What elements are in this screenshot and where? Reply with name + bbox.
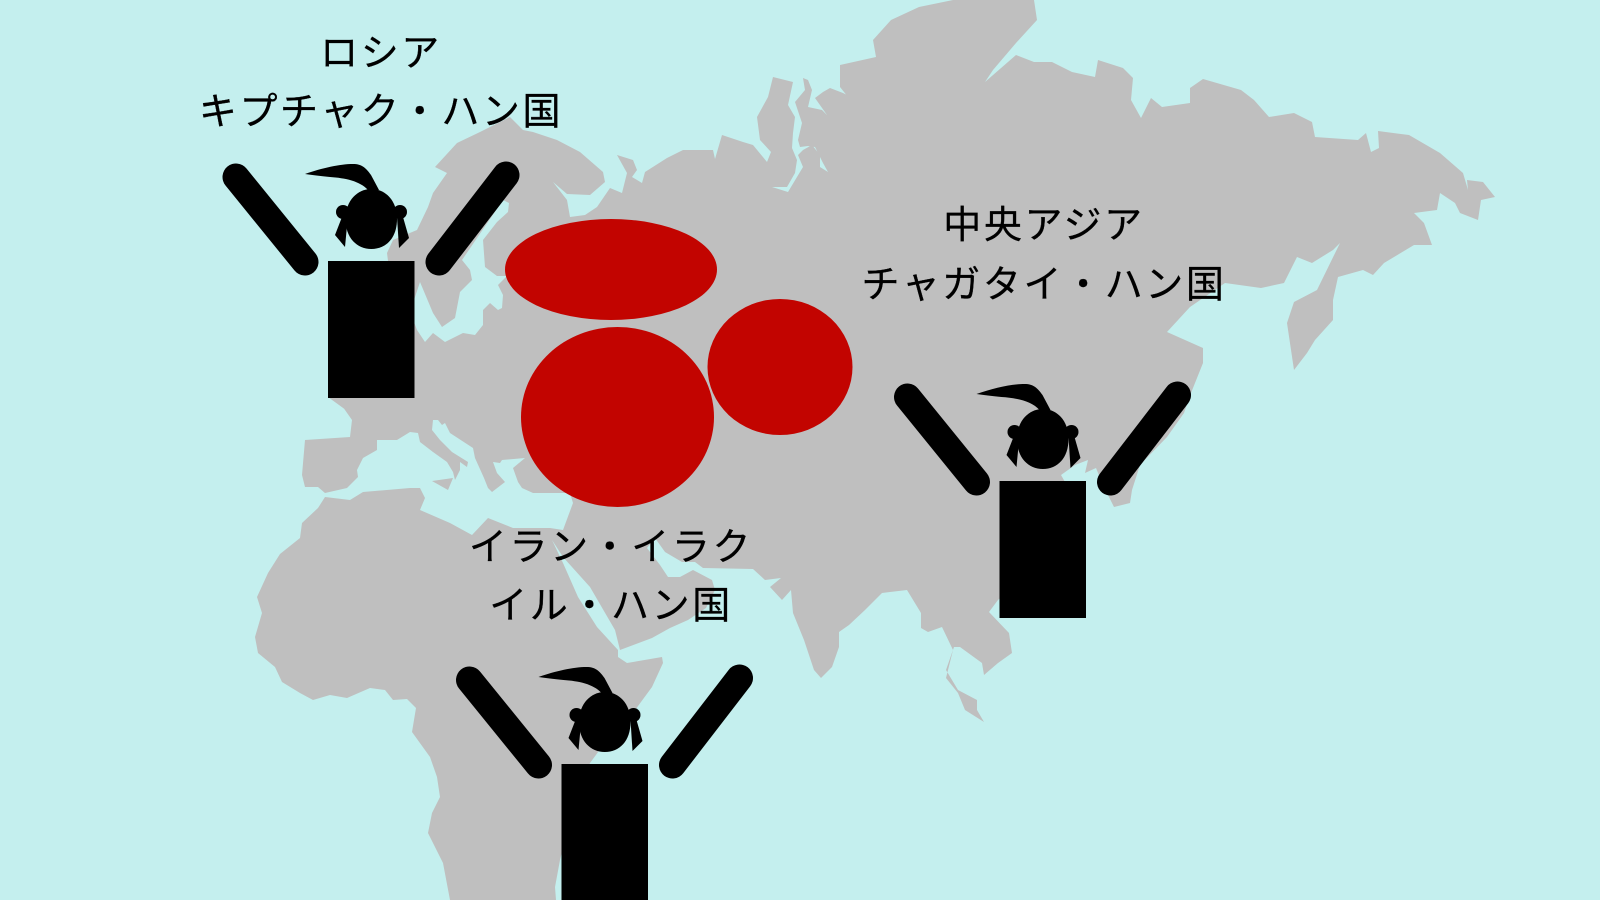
label: Russia / Kipchak Khanate: ロシア [320, 33, 442, 75]
label: Central Asia / Chagatai Khanate: 中央アジア [943, 205, 1145, 247]
Baltic Sea [414, 200, 509, 342]
red region: Ilkhanate [521, 327, 714, 507]
figure: Central Asia warrior [908, 384, 1178, 618]
figure: Russia warrior [236, 164, 506, 398]
world map land [255, 0, 1495, 900]
Sicily [432, 478, 453, 490]
red region: Chagatai Khanate [708, 299, 852, 435]
label: Iran Iraq / Ilkhanate: イル・ハン国 [489, 586, 733, 628]
figure: Iran Iraq warrior [470, 667, 740, 900]
label: Russia / Kipchak Khanate [199, 33, 563, 134]
red region: Kipchak Khanate [505, 219, 717, 320]
label: Central Asia / Chagatai Khanate [861, 205, 1227, 306]
label: Iran Iraq / Ilkhanate: イラン・イラク [469, 527, 753, 569]
label: Central Asia / Chagatai Khanate: チャガタイ・ハン国 [861, 264, 1227, 306]
label: Russia / Kipchak Khanate: キプチャク・ハン国 [199, 92, 563, 134]
label: Iran Iraq / Ilkhanate [469, 527, 753, 628]
